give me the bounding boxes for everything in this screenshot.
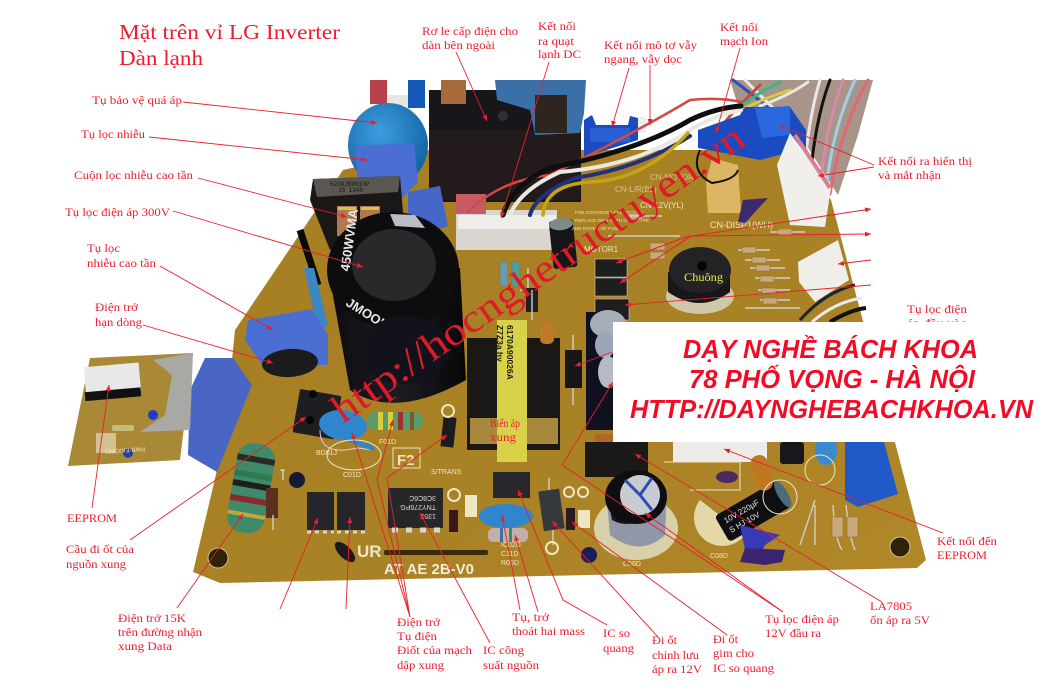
- silkscreen labels: AT AE 2B-V0: [384, 561, 474, 578]
- choke coil: [310, 176, 403, 250]
- label: Tụ lọc nhiễu cao tần: [87, 241, 156, 270]
- label: Tụ lọc nhiễu: Tụ lọc nhiễu: [81, 127, 145, 141]
- wiring harness to display: [725, 80, 868, 194]
- arrow: right 2 back: [620, 236, 691, 283]
- label: Cuộn lọc nhiễu cao tần: Cuộn lọc nhiễu cao tần: [74, 168, 193, 182]
- label: mạch dập xung: Điốt của mạch: [397, 643, 472, 657]
- buzzer label: Chuông: [684, 270, 723, 284]
- label: Tụ trở thoát: thoát hai mass: [512, 624, 585, 638]
- label: Đi ốt gim: Đi ốt: [713, 632, 739, 646]
- label: Tụ bảo vệ quá áp: Tụ bảo vệ quá áp: [92, 93, 182, 107]
- silkscreen labels: CN-12V(YL): [640, 201, 684, 210]
- arrow: Rơ le: [456, 52, 487, 121]
- arrow: mô tơ ngang: [612, 68, 629, 127]
- label: quạt lạnh DC: [538, 19, 581, 61]
- arrow: Tụ lọc 300V: [173, 211, 363, 267]
- label: Đi ốt chỉnh lưu: Đi ốt: [652, 633, 678, 647]
- arrow: mạch Ion: [716, 48, 740, 133]
- banner: 78 PHỐ VỌNG - HÀ NỘI: [689, 364, 976, 394]
- main capacitor 300V: 450WVMA: [337, 207, 361, 272]
- silkscreen labels: C01D: [343, 472, 361, 479]
- TNY IC: 1351: [420, 512, 436, 519]
- silkscreen labels: AND RATING OF FUSE.: [572, 226, 621, 231]
- large output capacitor: [594, 470, 678, 560]
- arrow: dập xung diode: [387, 435, 447, 617]
- buzzer: [666, 247, 734, 314]
- label: IC so quang: [603, 626, 634, 655]
- label: quạt lạnh DC: ra quạt: [538, 34, 575, 48]
- arrow: Điện trở hạn dòng: [143, 325, 273, 363]
- label: mạch dập xung: Điện trở: [397, 615, 441, 629]
- label: IC so quang: quang: [603, 641, 634, 655]
- arrow: IC so quang: [518, 490, 607, 625]
- transformer: 6170A90026A: [505, 325, 515, 380]
- green resistor fuse: [367, 412, 423, 430]
- blue ceramic capacitor: [318, 408, 372, 450]
- TNY IC: [388, 488, 443, 530]
- label: LA7805: LA7805: [870, 599, 912, 613]
- label: mô tơ vẫy: ngang, vẫy dọc: [604, 52, 682, 66]
- arrow: IC công suất: [420, 513, 490, 643]
- relay: [429, 80, 586, 202]
- arrow: Tụ lọc nhiễu: [149, 137, 367, 160]
- white connector 2: [798, 240, 849, 302]
- blue connector: ion and display: [698, 106, 806, 160]
- orange capacitor: [749, 453, 775, 492]
- arrow: right 2: [620, 234, 871, 283]
- arrow: mắt nhận: [818, 167, 874, 176]
- silkscreen labels: CN-DISP1(WH): [710, 220, 773, 230]
- small electrolytic capacitor: [548, 217, 578, 269]
- label: IC công suất: suất nguồn: [483, 658, 539, 672]
- silkscreen labels: MOTOR1: [584, 245, 619, 254]
- arrow: tụ lọc 12V b: [645, 513, 783, 612]
- label: IC công suất: [483, 643, 539, 672]
- arrow: LA7805: [635, 454, 882, 602]
- label: mô tơ vẫy: Kết nối mô tơ vẫy: [604, 38, 697, 52]
- label: quạt lạnh DC: lạnh DC: [538, 47, 581, 61]
- label: EEPROM: EEPROM: [67, 511, 117, 525]
- silkscreen labels: CN-MOTOR: [650, 173, 694, 182]
- varistor: blue disc: [348, 103, 428, 187]
- banner: [613, 322, 1050, 442]
- TNY IC: 3C8C6C: [409, 494, 436, 501]
- yellow connector: [697, 150, 741, 213]
- silkscreen labels: IC02D: [501, 542, 521, 549]
- C01D circle outline: [327, 440, 381, 470]
- wire bundle backdrop: [730, 80, 873, 195]
- label: Điện trở 15K: trên đường nhận: [118, 625, 202, 639]
- blue connector: motor swing: [584, 115, 646, 157]
- arrow: right 1 back: [616, 237, 686, 263]
- black capacitor tilted: [715, 479, 795, 542]
- label: Tụ lọc 12V: [765, 612, 839, 640]
- label: mạch dập xung: [397, 615, 472, 672]
- arrow: Tụ lọc nhiễu cao tần: [160, 266, 273, 330]
- label: LA7805: ổn áp ra 5V: [870, 613, 930, 627]
- label: Điện trở hạn dòng: [95, 300, 142, 329]
- diodes bottom: [538, 478, 597, 563]
- label: Tụ lọc nhiễu cao tần: nhiễu cao tần: [87, 256, 156, 270]
- label: Kết nối đến EEPROM: EEPROM: [937, 548, 987, 562]
- label: Tụ trở thoát: Tụ, trở: [512, 610, 550, 624]
- arrow: dập xung tụ: [352, 433, 410, 617]
- blue eeprom connector: [845, 442, 898, 507]
- eeprom daughter board: [68, 353, 193, 466]
- lower right wires: [800, 285, 866, 322]
- choke coil: JS 1345: [338, 187, 364, 194]
- arrow: opto left: [280, 518, 318, 609]
- arrow: right 3: [838, 260, 871, 264]
- main capacitor 300V: JMOOL: [343, 295, 391, 332]
- blue capacitor second: [408, 186, 448, 236]
- label: Cầu đi ốt: Cầu đi ốt của: [66, 542, 135, 556]
- top wires and terminals: [370, 80, 425, 111]
- label: hiển thị: [878, 154, 973, 182]
- silkscreen labels: [316, 173, 773, 578]
- title: [119, 20, 340, 70]
- silkscreen labels: R05D: [501, 560, 519, 567]
- silkscreen labels: C06D: [623, 561, 641, 568]
- label: Tụ lọc 12V: 12V đầu ra: [765, 626, 822, 640]
- diodes middle: [440, 405, 477, 532]
- resistors near motor: [500, 213, 680, 286]
- blue ceramic small: [815, 435, 837, 465]
- label: mô tơ vẫy: [604, 38, 697, 66]
- title: Dàn lạnh: [119, 46, 204, 70]
- label: Đi ốt chỉnh lưu: chỉnh lưu: [652, 648, 699, 662]
- black capacitor tilted: S HJ 10V: [728, 510, 762, 535]
- choke coil: 6200JB8010P: [330, 181, 370, 188]
- large blue box capacitor: [188, 358, 252, 472]
- silkscreen labels: BD01J: [316, 450, 337, 457]
- arrow: Tụ bảo vệ quá áp: [183, 102, 377, 123]
- label: mạch dập xung: dập xung: [397, 658, 444, 672]
- optocouplers bottom left: [307, 492, 365, 532]
- label: mạch dập xung: Tụ điện: [397, 629, 437, 643]
- title: Mặt trên vỉ LG Inverter: [119, 20, 340, 44]
- blue filter capacitor top: [355, 143, 418, 200]
- lower right resistors: [664, 455, 858, 550]
- silkscreen labels: C11D: [501, 551, 518, 558]
- photo: circuit board: [68, 80, 926, 583]
- black capacitor tilted: 10V 220µF: [722, 498, 761, 525]
- silkscreen labels: C08D: [710, 553, 728, 560]
- transformer: Z7Z3a hy: [495, 325, 505, 362]
- arrow: hiển thị: [779, 125, 874, 165]
- arrow: tụ lọc 12V a: [562, 382, 783, 612]
- silkscreen labels: CN-L/R(BL): [615, 185, 657, 194]
- label: LA7805: [870, 599, 930, 627]
- label: Đi ốt gim: gim cho: [713, 646, 754, 660]
- fan connector: [456, 194, 557, 250]
- label: Điện trở 15K: xung Data: [118, 639, 173, 653]
- orange capacitor and diode near transformer: [520, 268, 582, 405]
- C08D outline: [694, 500, 745, 546]
- label: IC so quang: IC so: [603, 626, 630, 640]
- transformer label: xung: [490, 430, 516, 444]
- arrow: Kết nối EEPROM: [724, 449, 943, 533]
- arrow: Tụ thoát mass: [502, 515, 520, 610]
- UR mark: UR: [357, 542, 382, 561]
- eeprom daughter board: PWB:EAX3651: [103, 445, 145, 454]
- label: Đi ốt gim: IC so quang: [713, 661, 774, 675]
- arrow: Trở thoát mass: [515, 535, 538, 612]
- clipped label behind banner: áp đầu vào: [907, 316, 967, 330]
- slot: [384, 550, 488, 555]
- label: Rơ le: dàn bên ngoài: [422, 38, 496, 52]
- arrow: EEPROM: [92, 385, 109, 508]
- silkscreen labels: F2: [397, 452, 415, 469]
- black varistor: [261, 347, 319, 379]
- label: Tụ lọc điện áp 300V: Tụ lọc điện áp 300V: [65, 205, 170, 219]
- banner: DẠY NGHỀ BÁCH KHOA: [683, 334, 978, 364]
- label: IC công suất: IC công: [483, 643, 524, 657]
- label: Tụ trở thoát: [512, 610, 585, 638]
- optocouplers column: [595, 259, 629, 320]
- transformer: [467, 320, 560, 462]
- label: Điện trở hạn dòng: Điện trở: [95, 300, 139, 314]
- mounting holes: [208, 537, 910, 568]
- label: Cầu đi ốt: nguồn xung: [66, 557, 126, 571]
- transformer label: [490, 416, 520, 444]
- label: Điện trở 15K: Điện trở 15K: [118, 611, 186, 625]
- label: Tụ lọc nhiễu cao tần: Tụ lọc: [87, 241, 120, 255]
- resistors beside buzzer: [738, 229, 805, 308]
- arrow: dập xung trở: [377, 420, 410, 617]
- label: Rơ le: [422, 24, 518, 52]
- arrow: Cuộn lọc nhiễu: [198, 178, 347, 217]
- 15K resistor: [224, 441, 278, 536]
- watermark url: http://hocnghetructuyen.vn: [323, 114, 753, 431]
- silkscreen labels: FOR CONTINUED PROTECTION: [575, 210, 643, 215]
- label: Điện trở 15K: [118, 611, 202, 653]
- label: Tụ lọc 12V: Tụ lọc điện áp: [765, 612, 839, 626]
- silkscreen labels: S/TRANS: [431, 469, 462, 476]
- label: Cầu đi ốt: [66, 542, 135, 571]
- label: hiển thị: Kết nối ra hiển thị: [878, 154, 973, 168]
- main capacitor 300V: [327, 207, 466, 403]
- black wire with blue sleeve: [300, 230, 328, 330]
- dark blob: [332, 539, 358, 565]
- label: Rơ le: Rơ le cấp điện cho: [422, 24, 518, 38]
- label: quạt lạnh DC: Kết nối: [538, 19, 577, 33]
- label: Kết nối đến EEPROM: Kết nối đến: [937, 534, 997, 548]
- transformer label: Biến áp: [490, 416, 520, 430]
- clipped label behind banner: [907, 302, 967, 330]
- silkscreen labels: F01D: [379, 439, 396, 446]
- white display connector: [777, 133, 831, 227]
- arrow: mô tơ dọc: [649, 65, 651, 125]
- label: Đi ốt chỉnh lưu: [652, 633, 702, 676]
- arrow: chỉnh lưu: [552, 521, 658, 637]
- small black cap: [780, 442, 804, 464]
- label: Đi ốt chỉnh lưu: áp ra 12V: [652, 662, 702, 676]
- label: hiển thị: và mắt nhận: [878, 168, 941, 182]
- capacitor bank behind banner: [586, 310, 626, 430]
- arrow: gim: [572, 522, 727, 635]
- TO220 regulator: [585, 434, 648, 477]
- silkscreen labels: REPLACE ONLY WITH SAME TYPE: [575, 218, 649, 223]
- label: Điện trở hạn dòng: hạn dòng: [95, 315, 142, 329]
- small diode and dark cap: [266, 470, 305, 530]
- label: mạch Ion: Kết nối: [720, 20, 759, 34]
- fan harness wires: [468, 99, 741, 215]
- arrow: quạt DC: [501, 62, 549, 218]
- label: mạch Ion: [720, 20, 768, 48]
- clipped label behind banner: Tụ lọc điện: [907, 302, 967, 316]
- TNY IC: TNY276PG: [400, 503, 436, 510]
- arrow: Điện trở 15K: [177, 514, 243, 608]
- bridge diode: [292, 389, 341, 439]
- blue filter capacitor lower: [245, 309, 328, 365]
- banner: HTTP://DAYNGHEBACHKHOA.VN: [630, 394, 1034, 424]
- label: Đi ốt gim: [713, 632, 774, 675]
- label: mạch Ion: mạch Ion: [720, 34, 768, 48]
- arrow: Cầu đi ốt: [130, 417, 306, 540]
- purple marks: [716, 198, 785, 565]
- arrow: right 1: [616, 209, 871, 263]
- board substrate: [193, 150, 926, 583]
- label: Kết nối đến EEPROM: [937, 534, 997, 562]
- opto and blue cap bottom centre: [479, 472, 533, 542]
- arrow: opto right: [346, 517, 350, 609]
- arrow: diode upper: [575, 352, 612, 366]
- arrow: right 4: [625, 285, 871, 305]
- eeprom connector white: [673, 442, 767, 462]
